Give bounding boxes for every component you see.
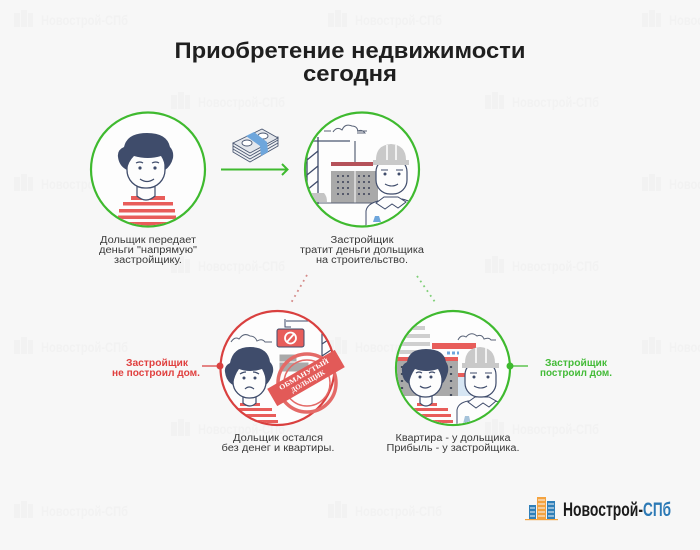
watermarks: Новострой-СПб <box>41 503 128 519</box>
text: investor pays: застройщику. <box>114 255 182 266</box>
text: developer spends: на строительство. <box>316 255 408 266</box>
text: apartment and profit: Квартира - у дольщика <box>396 433 511 444</box>
watermarks: Новострой-СПб <box>41 176 128 192</box>
stamp: deceived investor: ОБМАНУТЫЙ <box>278 357 331 392</box>
illustration: deceived investor <box>225 319 334 423</box>
watermarks: Новострой-СПб <box>198 94 285 110</box>
title: сегодня <box>303 61 397 86</box>
watermarks: Новострой-СПб <box>198 421 285 437</box>
text: apartment and profit <box>386 433 520 454</box>
title: Приобретение недвижимости <box>174 38 526 63</box>
logo: Новострой- <box>563 499 643 521</box>
panel: developer builds <box>296 112 424 228</box>
callout: not built <box>112 358 224 379</box>
watermarks: Новострой-СПб <box>355 503 442 519</box>
callout: not built: не построил дом. <box>112 368 200 379</box>
text: investor left without money: без денег и квартиры. <box>222 442 334 454</box>
watermarks: Новострой-СПб <box>355 12 442 28</box>
text: investor left without money: Дольщик остался <box>233 433 323 444</box>
arrow: to developer <box>221 164 288 175</box>
watermarks: Новострой-СПб <box>512 421 599 437</box>
watermarks: Новострой-СПб <box>512 258 599 274</box>
panel: investor pays developer <box>91 112 205 226</box>
callout: built: Застройщик <box>545 358 608 369</box>
illustration: investor and developer with new buildings <box>397 326 499 424</box>
watermarks: Новострой-СПб <box>355 339 442 355</box>
watermarks: Новострой-СПб <box>41 339 128 355</box>
text: investor pays <box>99 235 197 266</box>
logo <box>525 497 671 521</box>
icon: money stack <box>233 129 278 162</box>
logo: СПб <box>643 499 671 521</box>
panel: house built <box>396 311 510 428</box>
callout: built: построил дом. <box>540 368 612 379</box>
text: investor left without money <box>222 433 334 454</box>
stamp: deceived investor <box>267 350 345 412</box>
connector: green branch <box>417 276 435 302</box>
watermarks: Новострой-СПб <box>41 12 128 28</box>
icon: logo buildings <box>525 497 558 520</box>
callout: not built: Застройщик <box>126 358 189 369</box>
watermarks: Новострой-СПб <box>198 258 285 274</box>
title <box>174 38 526 86</box>
icon: investor portrait <box>118 133 176 226</box>
text: apartment and profit: Прибыль - у застройщика. <box>386 442 520 454</box>
callout: built <box>506 358 612 379</box>
watermarks: Новострой-СПб <box>512 94 599 110</box>
text: developer spends <box>300 235 424 266</box>
illustration: crane, building, developer <box>306 124 409 226</box>
stamp: deceived investor: ДОЛЬЩИК <box>290 368 327 394</box>
text: investor pays: Дольщик передает <box>100 235 196 246</box>
text: investor pays: деньги "напрямую" <box>99 245 197 256</box>
text: developer spends: тратит деньги дольщика <box>300 245 424 256</box>
connector: red branch <box>291 275 307 303</box>
panel: house not built <box>220 311 345 425</box>
text: developer spends: Застройщик <box>330 235 394 246</box>
